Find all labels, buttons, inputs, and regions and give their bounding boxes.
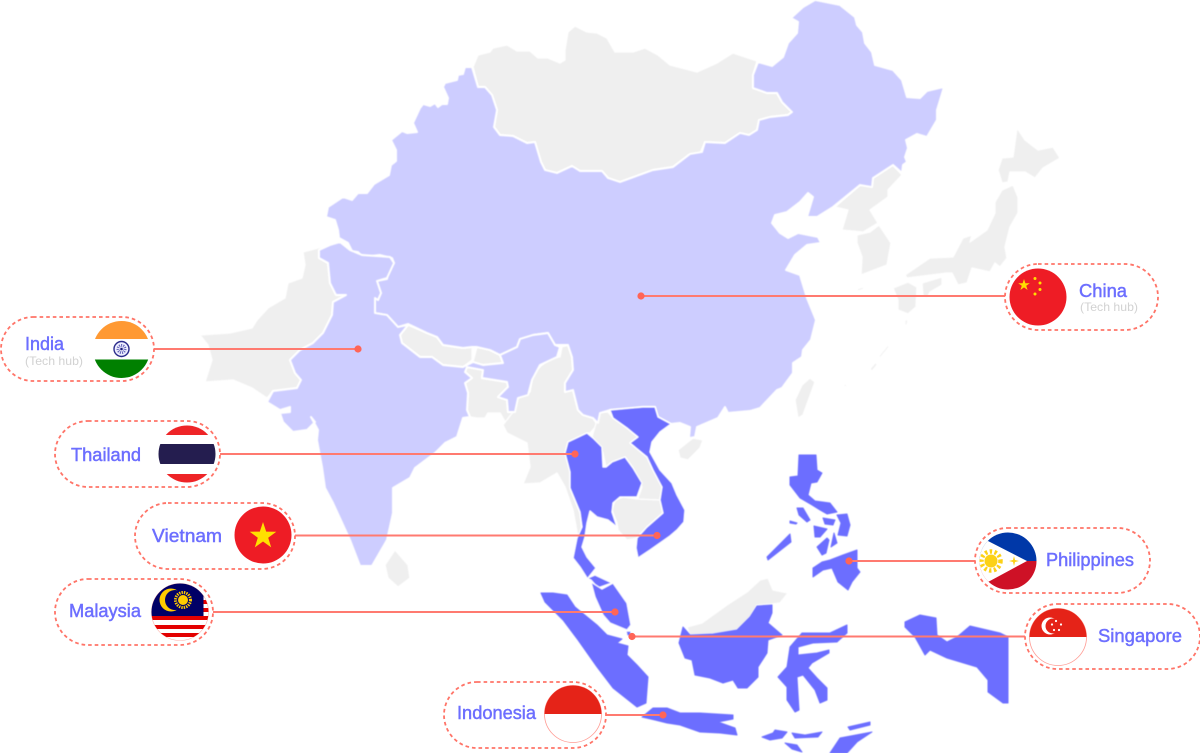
flag: Philippines: [979, 532, 1037, 590]
callout: Singapore: [1025, 604, 1200, 669]
flag: Vietnam: [234, 506, 292, 564]
map: Java: [642, 708, 737, 735]
callout: India: [1, 317, 154, 381]
connector: Indonesia: [606, 711, 667, 719]
label: Malaysia: Malaysia: [69, 601, 142, 621]
map: China in light purple: [267, 0, 944, 566]
connector: China: [637, 292, 1005, 300]
map: neighbouring countries in grey: [200, 26, 1060, 635]
sublabel: China tech hub: (Tech hub): [1080, 300, 1138, 314]
flag: Thailand: [158, 425, 216, 484]
map: India in light purple: [267, 242, 560, 566]
map: Sumatra: [541, 593, 648, 707]
label: Philippines: Philippines: [1046, 550, 1134, 570]
connector lines: [154, 292, 1025, 719]
flag: Malaysia: [151, 583, 209, 645]
label: Singapore: Singapore: [1098, 626, 1182, 646]
label: Indonesia: Indonesia: [457, 703, 537, 723]
map: Papua: [905, 615, 1008, 703]
flag: Indonesia: [544, 685, 602, 742]
flag: China: [1010, 268, 1066, 326]
map: highlighted Southeast Asia countries: [541, 407, 1008, 753]
map: Borneo: [679, 605, 782, 688]
connector: India: [154, 345, 362, 353]
label: Vietnam: Vietnam: [152, 526, 222, 546]
connector: Singapore: [628, 633, 1025, 640]
connector: Vietnam: [295, 532, 661, 539]
map: Lesser Sunda islands: [762, 722, 872, 753]
callout: Thailand: [55, 421, 220, 487]
map: Malaysia: [591, 582, 631, 630]
callout: China: [1005, 264, 1158, 330]
map: Philippines: [767, 455, 860, 590]
callout: Malaysia: [55, 579, 213, 645]
connector: Malaysia: [213, 608, 619, 616]
callout: Vietnam: [135, 503, 295, 569]
map: Vietnam: [610, 407, 685, 558]
sublabel: India tech hub: (Tech hub): [25, 354, 83, 368]
callout: Philippines: [975, 528, 1150, 593]
connector: Thailand: [220, 450, 579, 458]
flag: India: [93, 321, 150, 378]
map: Singapore: [626, 631, 631, 636]
label: Thailand: Thailand: [71, 445, 141, 465]
connector: Philippines: [845, 557, 975, 565]
map: Sulawesi: [778, 625, 847, 712]
flag: Singapore: [1029, 608, 1087, 666]
label: China: China: [1079, 281, 1128, 301]
map: Thailand: [565, 433, 642, 588]
label: India: India: [25, 334, 65, 354]
callout: Indonesia: [444, 682, 606, 748]
